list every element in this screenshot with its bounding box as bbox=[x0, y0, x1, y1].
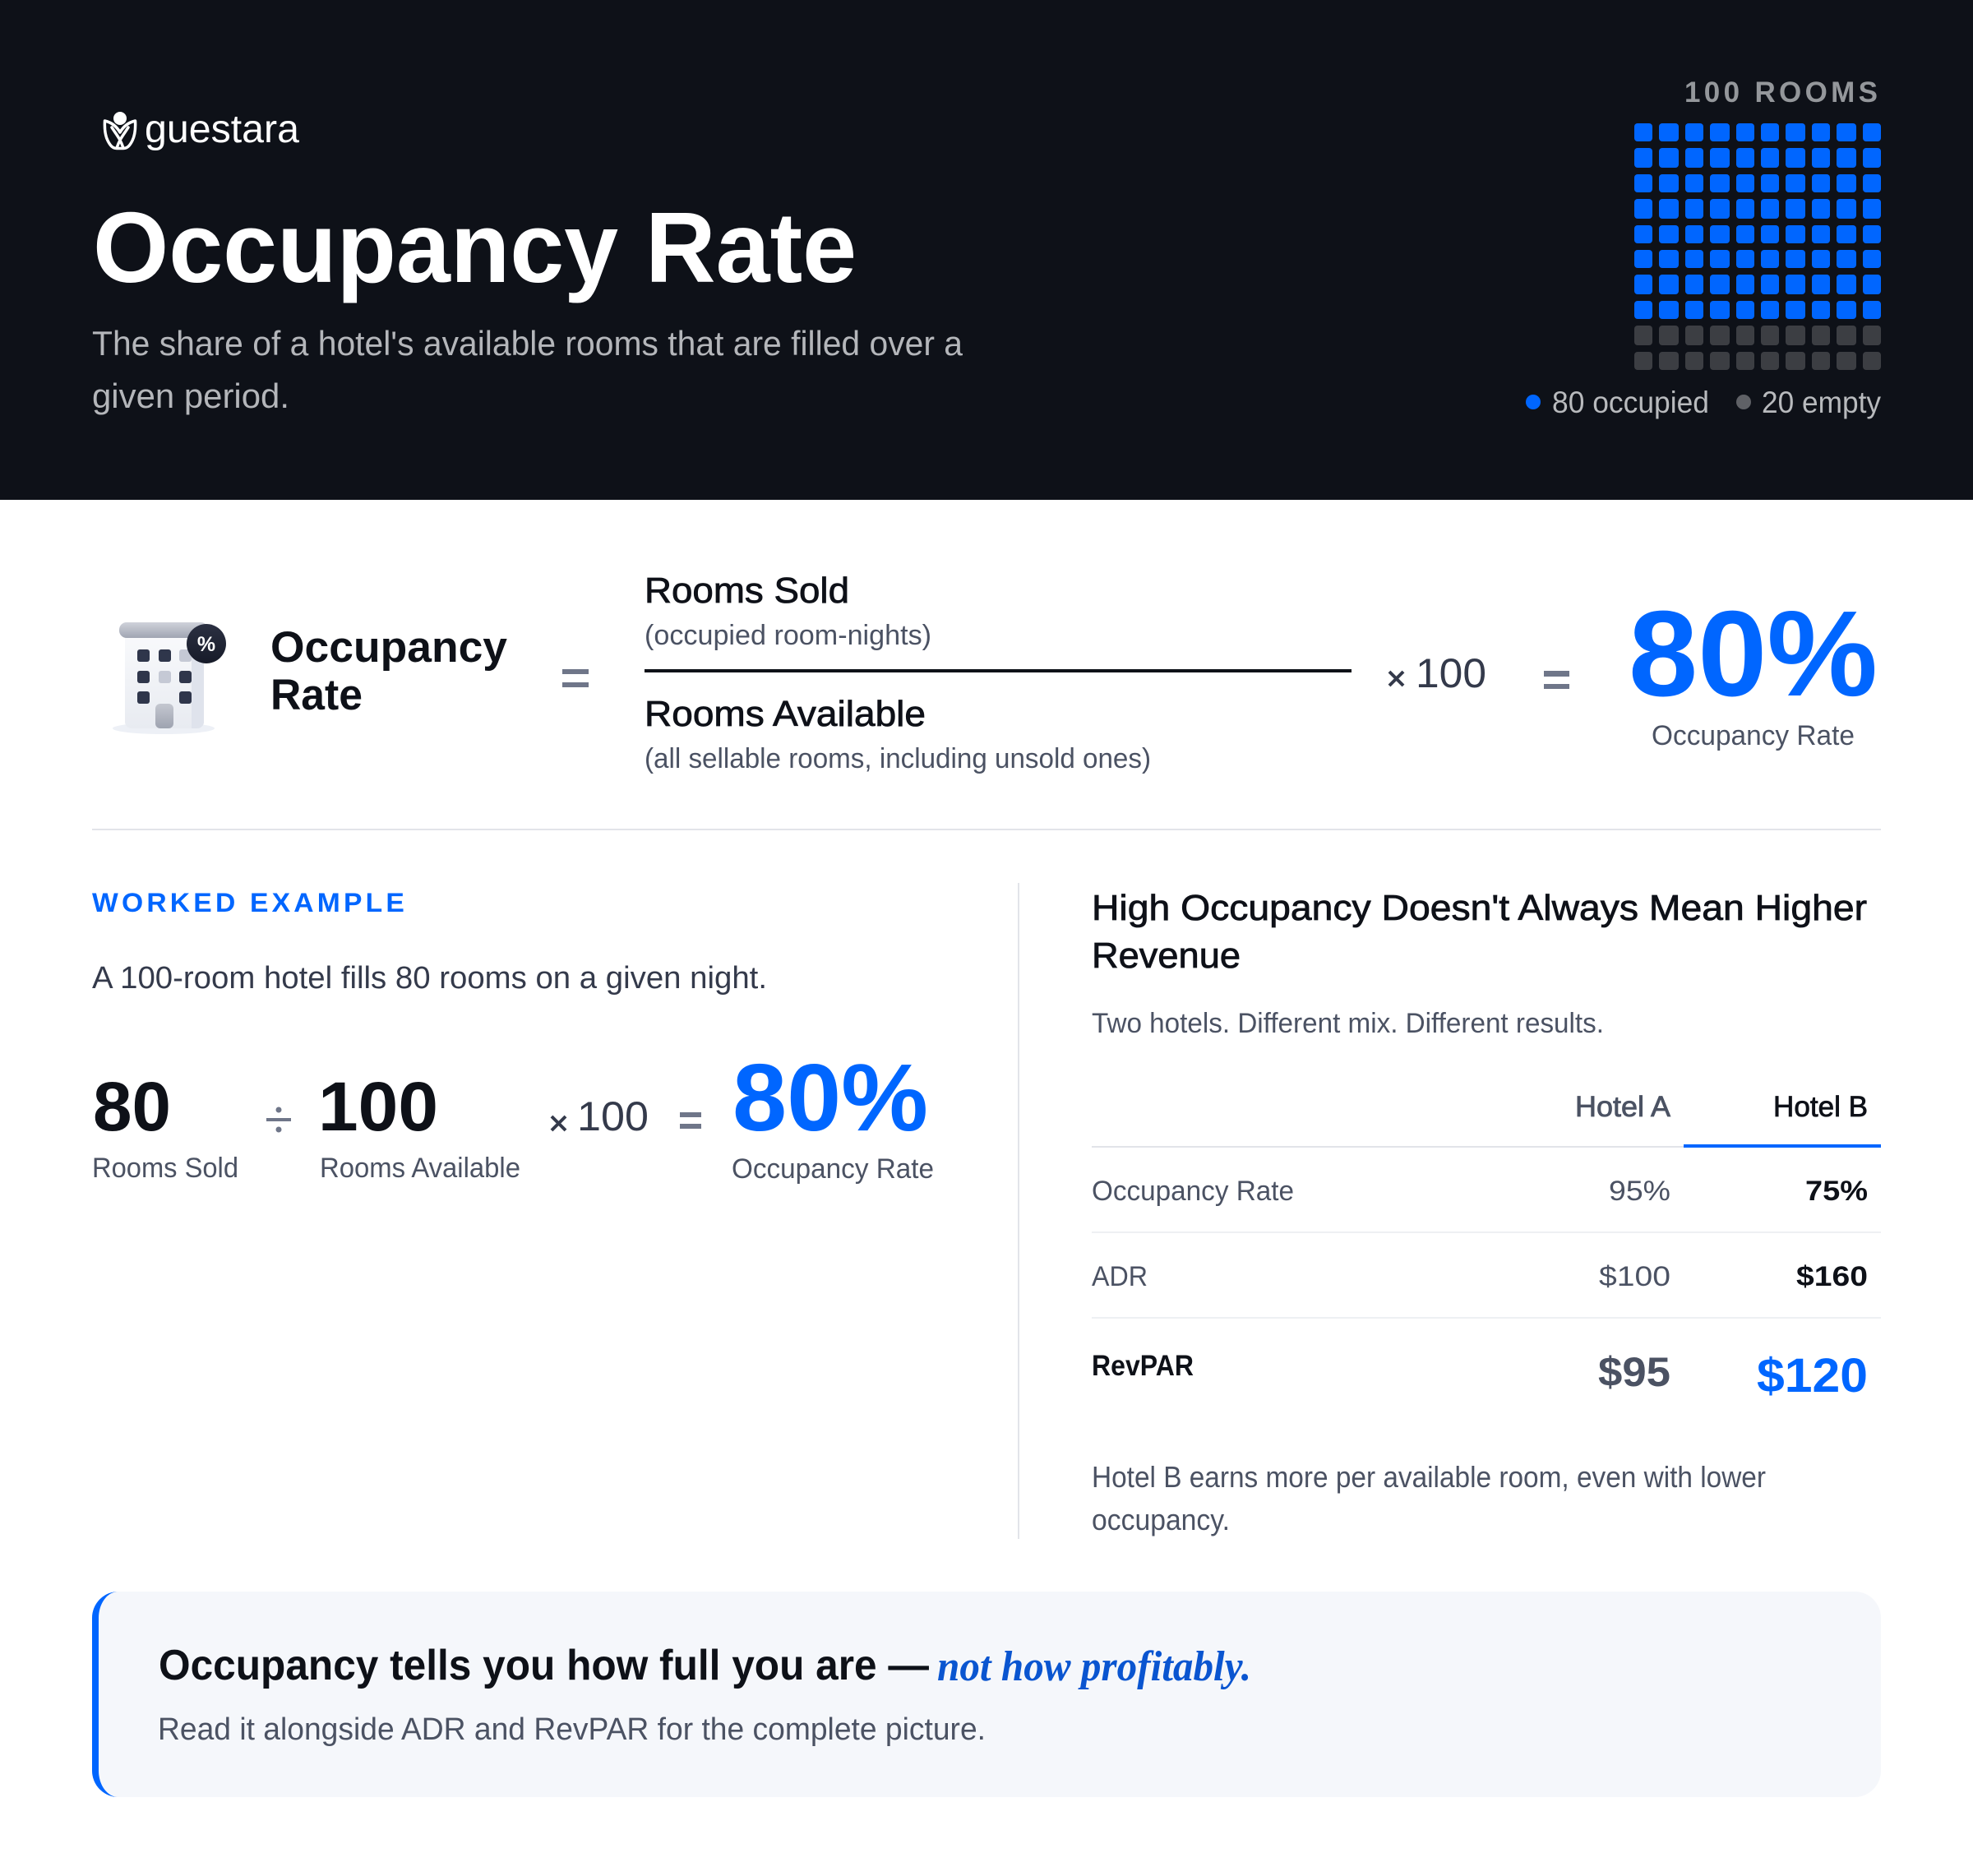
row: RevPAR bbox=[1092, 1349, 1868, 1402]
text: two hotels: Two hotels. Different mix. Different results. bbox=[1092, 1008, 1604, 1039]
text: takeaway note: occupancy. bbox=[1092, 1503, 1230, 1536]
equation: rooms sold: 80 bbox=[93, 1068, 171, 1145]
panel: worked example bbox=[92, 888, 934, 1185]
result: 80 percent: 80% bbox=[1629, 586, 1878, 722]
text: takeaway note: Hotel B earns more per available room, even with lower bbox=[1092, 1460, 1766, 1494]
operator: times 100: 100 bbox=[577, 1093, 649, 1139]
legend: occupied and empty: 20 empty bbox=[1762, 386, 1881, 419]
formula label: occupancy rate bbox=[270, 623, 508, 719]
formula label: occupancy rate: Occupancy bbox=[270, 623, 508, 672]
heading: worked example: WORKED EXAMPLE bbox=[92, 888, 408, 917]
comparison table bbox=[1092, 1091, 1881, 1402]
fraction: rooms sold over rooms available bbox=[645, 571, 1352, 774]
subtitle: The share of a hotel's available rooms that are filled over a bbox=[92, 324, 963, 363]
heading: high occupancy: High Occupancy Doesn't Always Mean Higher bbox=[1092, 888, 1867, 928]
row: ADR: $100 bbox=[1599, 1261, 1670, 1292]
row: RevPAR: $120 bbox=[1757, 1349, 1868, 1402]
equals sign bbox=[562, 669, 589, 687]
table header bbox=[1092, 1091, 1881, 1148]
row: occupancy rate: Occupancy Rate bbox=[1092, 1176, 1294, 1207]
callout headline: Occupancy tells you how full you are — bbox=[159, 1642, 929, 1689]
panel: formula row bbox=[113, 571, 1878, 774]
logo: guestara bbox=[104, 108, 299, 151]
panel: header banner bbox=[0, 0, 1973, 500]
title: Occupancy Rate bbox=[93, 192, 857, 303]
multiplier: times 100: 100 bbox=[1416, 650, 1486, 696]
heading: high occupancy: Revenue bbox=[1092, 936, 1241, 976]
text: scenario: A 100-room hotel fills 80 rooms on a given night. bbox=[92, 961, 767, 996]
legend: occupied and empty bbox=[1526, 386, 1881, 419]
wordmark: guestara bbox=[145, 108, 299, 151]
operator: equals bbox=[680, 1112, 701, 1129]
subtitle bbox=[92, 324, 963, 415]
table header: Hotel B bbox=[1773, 1091, 1868, 1123]
operator: divide bbox=[266, 1107, 291, 1133]
fraction: rooms sold over rooms available: (occupied room-nights) bbox=[645, 620, 931, 651]
callout: key takeaway bbox=[92, 1592, 1881, 1797]
legend: occupied and empty: 80 occupied bbox=[1552, 386, 1709, 419]
chart label: 100 rooms: 100 ROOMS bbox=[1684, 76, 1878, 109]
callout headline: not how profitably. bbox=[937, 1643, 1251, 1690]
fraction: rooms sold over rooms available: (all sellable rooms, including unsold ones) bbox=[645, 743, 1151, 774]
callout subline: Read it alongside ADR and RevPAR for the complete picture. bbox=[158, 1712, 986, 1747]
row: ADR: ADR bbox=[1092, 1261, 1148, 1292]
icon: guestara tulip figure bbox=[104, 112, 136, 148]
equation: rooms sold bbox=[92, 1068, 238, 1184]
equation: rooms available: Rooms Available bbox=[320, 1153, 520, 1184]
row: occupancy rate bbox=[1092, 1176, 1881, 1233]
row: RevPAR: RevPAR bbox=[1092, 1350, 1194, 1382]
equation: rooms available bbox=[318, 1068, 520, 1184]
fraction: rooms sold over rooms available: Rooms Sold bbox=[645, 571, 849, 611]
row: RevPAR: $95 bbox=[1598, 1349, 1670, 1395]
result: 80 percent: Occupancy Rate bbox=[1652, 720, 1855, 751]
table header: Hotel A bbox=[1575, 1091, 1671, 1123]
formula label: occupancy rate: Rate bbox=[270, 671, 363, 719]
icon: hotel building with percent badge: % bbox=[197, 633, 215, 656]
equation: rooms sold: Rooms Sold bbox=[92, 1153, 238, 1184]
row: ADR: $160 bbox=[1796, 1261, 1868, 1292]
result: 80 percent: 80% bbox=[732, 1044, 928, 1151]
equation: rooms available: 100 bbox=[318, 1068, 438, 1145]
heading: high occupancy bbox=[1092, 888, 1867, 976]
equals sign bbox=[1544, 671, 1569, 689]
icon: hotel building with percent badge bbox=[113, 622, 226, 734]
text: takeaway note bbox=[1092, 1460, 1766, 1536]
fraction: rooms sold over rooms available: Rooms Available bbox=[645, 694, 926, 734]
result: 80 percent: Occupancy Rate bbox=[732, 1153, 934, 1185]
row: occupancy rate: 95% bbox=[1609, 1176, 1670, 1207]
row: ADR bbox=[1092, 1261, 1881, 1319]
panel: hotel comparison bbox=[1092, 888, 1881, 1536]
row: occupancy rate: 75% bbox=[1805, 1176, 1868, 1207]
chart: room waffle grid, 80 occupied and 20 empty bbox=[1634, 123, 1881, 370]
subtitle: given period. bbox=[92, 377, 289, 415]
